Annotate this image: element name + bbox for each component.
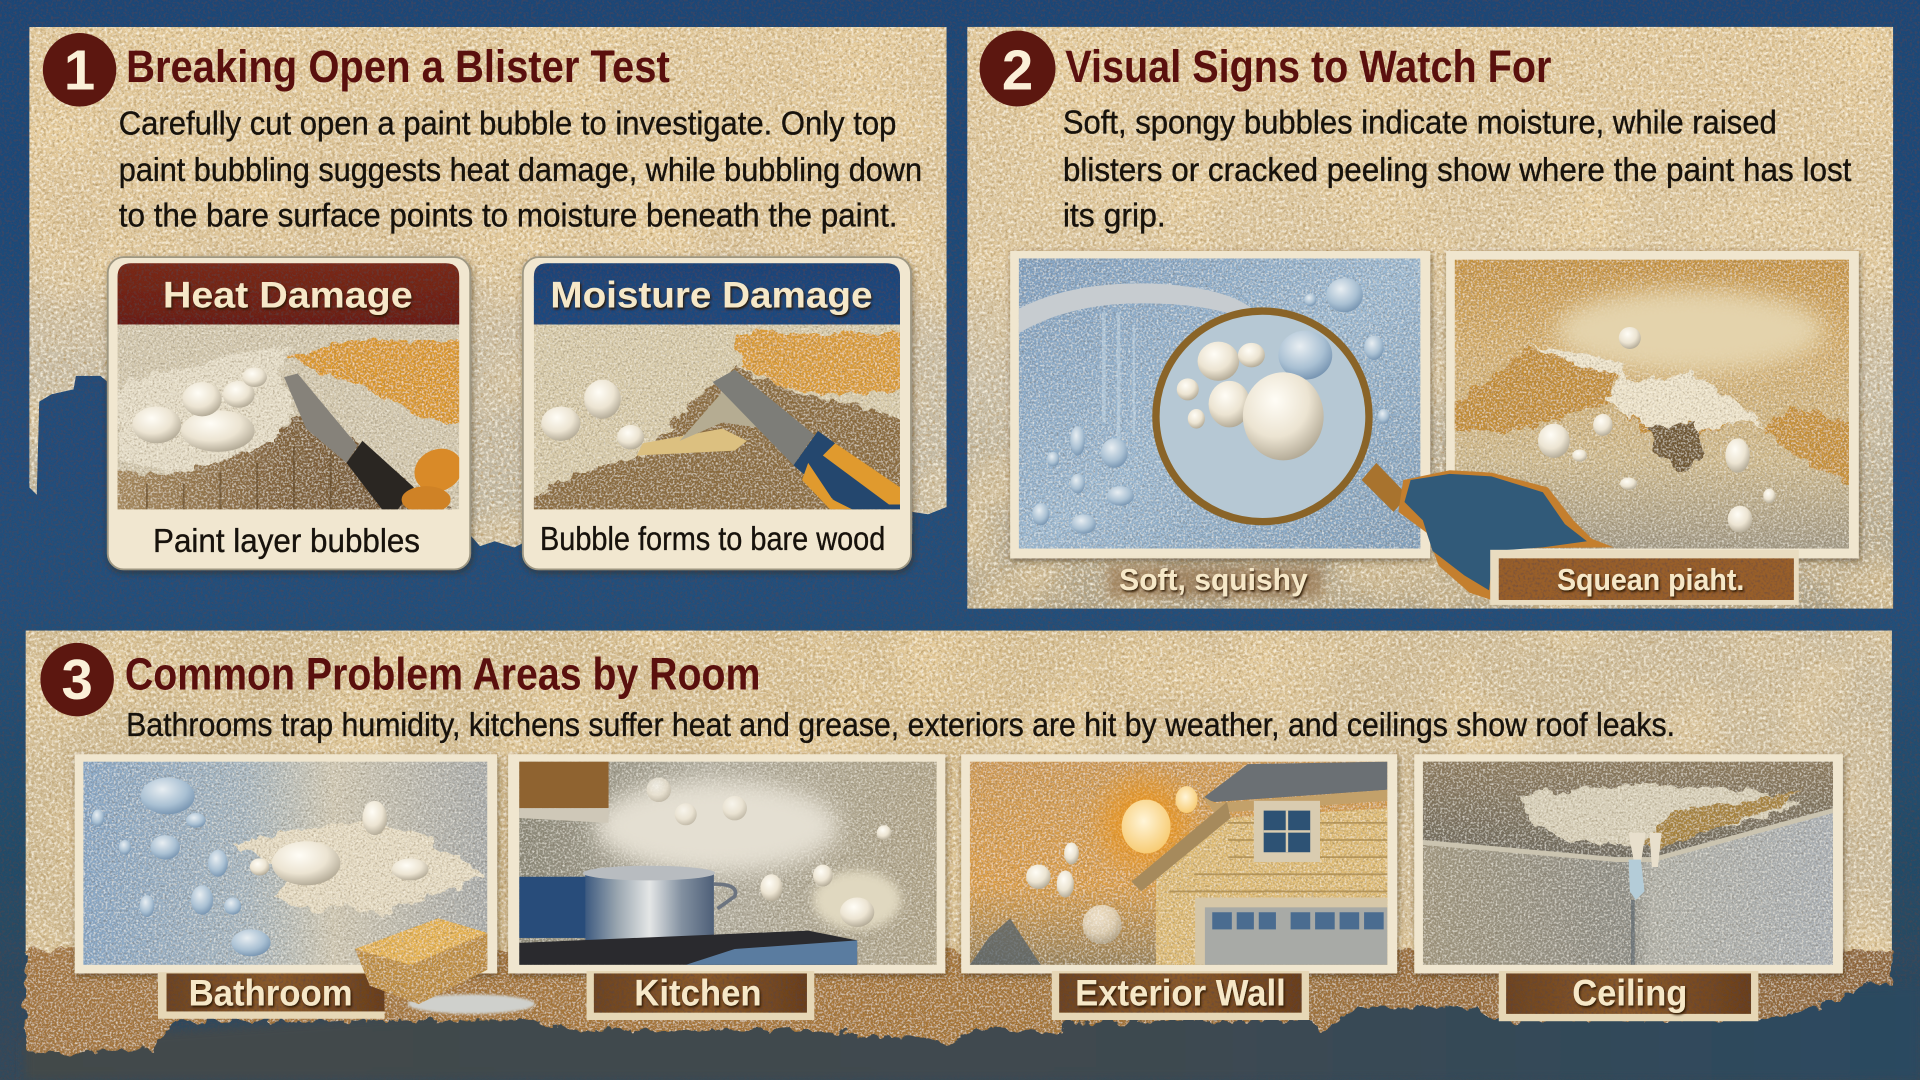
- blue blob: [1404, 474, 1587, 590]
- label: kitchen: [587, 971, 814, 1020]
- icon: sponge: [355, 918, 535, 1014]
- body text 1: [119, 106, 922, 235]
- label: exterior wall: Exterior Wall: [1075, 972, 1286, 1013]
- image: kitchen: [508, 754, 945, 973]
- body text 1: to the bare surface points to moisture beneath the paint.: [119, 198, 898, 235]
- heading 3: Common Problem Areas by Room: [125, 648, 760, 699]
- caption: squean piaht: [1490, 550, 1799, 605]
- number badge 2: [980, 31, 1056, 107]
- image: bathroom: [75, 754, 497, 973]
- label: bathroom: [158, 972, 384, 1019]
- body text 1: Carefully cut open a paint bubble to investigate. Only top: [119, 106, 896, 143]
- image: exterior wall: [961, 754, 1397, 973]
- panel 1: breaking open a blister test: [29, 27, 947, 569]
- panel 3: common problem areas by room: [26, 631, 1892, 1053]
- moisture damage header: [534, 263, 900, 324]
- heat damage title: Heat Damage: [163, 274, 413, 315]
- image: cracked peeling paint: [1446, 251, 1859, 558]
- panel 2: visual signs to watch for: [967, 27, 1893, 609]
- moisture damage title: Moisture Damage: [550, 274, 872, 315]
- body text 1: paint bubbling suggests heat damage, while bubbling down: [119, 152, 922, 189]
- panel 3 paper background: [26, 631, 1892, 955]
- magnifying glass: [1156, 311, 1408, 522]
- body text 2: [1063, 104, 1851, 235]
- image: ceiling: [1414, 754, 1843, 973]
- number badge 2: 2: [1002, 38, 1033, 101]
- card: heat damage: [108, 257, 471, 569]
- heading 2: Visual Signs to Watch For: [1065, 41, 1551, 92]
- label: kitchen: Kitchen: [634, 972, 762, 1013]
- illustration: knife opening moisture blister: [527, 324, 912, 514]
- heading 1: Breaking Open a Blister Test: [126, 41, 670, 92]
- panel 1 torn paper background: [29, 27, 947, 547]
- bottom dark floor band: [24, 986, 1920, 1080]
- label: ceiling: [1499, 971, 1758, 1021]
- caption: squean piaht: Squean piaht.: [1557, 563, 1744, 597]
- number badge 1: [43, 33, 116, 107]
- body text 2: blisters or cracked peeling show where the paint has lost: [1063, 152, 1851, 189]
- number badge 1: 1: [64, 38, 95, 101]
- heat damage header: [118, 263, 459, 324]
- wood floor strip: [26, 950, 1892, 1053]
- label: bathroom: Bathroom: [189, 972, 353, 1013]
- moisture damage caption: Bubble forms to bare wood: [540, 521, 885, 558]
- number badge 3: [40, 643, 114, 716]
- body text 3: Bathrooms trap humidity, kitchens suffer heat and grease, exteriors are hit by weather, and ceilings show roof leaks.: [126, 707, 1675, 744]
- panel 2 paper background: [967, 27, 1893, 609]
- number badge 3: 3: [61, 648, 93, 711]
- illustration: knife opening heat blister: [110, 324, 471, 514]
- body text 2: Soft, spongy bubbles indicate moisture, while raised: [1063, 104, 1777, 141]
- orange edge of covered shape: [1398, 470, 1614, 600]
- label: ceiling: Ceiling: [1572, 972, 1687, 1013]
- heat damage caption: Paint layer bubbles: [153, 523, 420, 560]
- body text 2: its grip.: [1063, 198, 1166, 235]
- caption: soft, squishy: Soft, squishy: [1119, 563, 1308, 597]
- image: soft squishy bubbles under magnifier: [1010, 251, 1430, 558]
- card: moisture damage: [523, 257, 912, 569]
